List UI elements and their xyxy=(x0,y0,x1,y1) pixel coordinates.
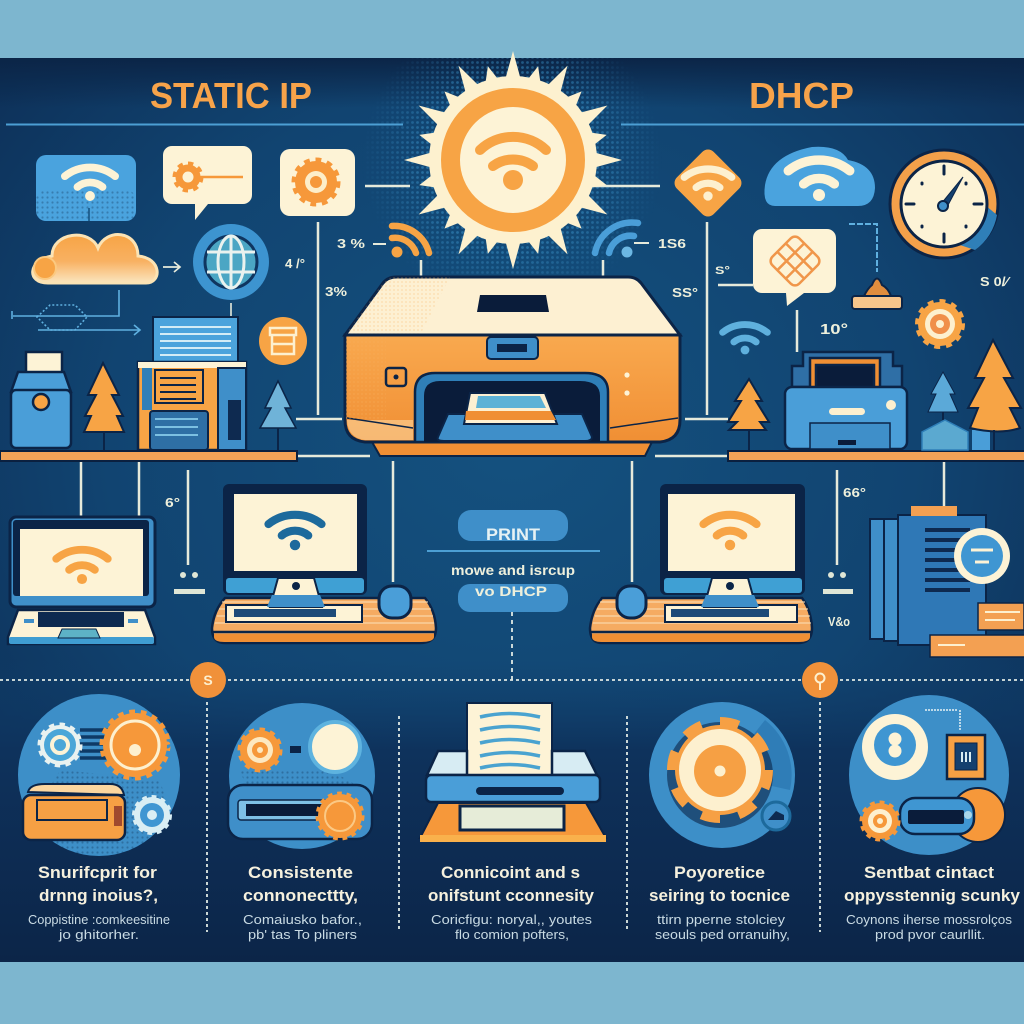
circuit connector xyxy=(12,290,231,335)
icon: laptop xyxy=(8,517,155,644)
icon: gauge clock xyxy=(890,150,998,258)
column 1 description: Coppistine :comkeesitine xyxy=(28,912,170,927)
column 3 title: onifstunt cconnesity xyxy=(428,887,595,905)
label: 3%: 3% xyxy=(325,284,348,299)
divider dots xyxy=(0,612,1024,932)
label: S: S° xyxy=(715,265,730,277)
icon: teal lock badge xyxy=(922,420,968,450)
panel: column 4 xyxy=(649,702,795,942)
label: 1S6: 1S6 xyxy=(658,236,686,251)
column 1 description: jo ghitorher. xyxy=(58,927,139,942)
badge label: PRINT xyxy=(486,525,541,544)
icon: small blue printer xyxy=(11,352,71,448)
panel: column 5 xyxy=(844,695,1021,942)
icon: orange tree left xyxy=(84,363,124,450)
column 2 title: Consistente xyxy=(248,864,353,882)
node marker left xyxy=(174,572,205,594)
icon: right monitor and desk xyxy=(590,484,812,643)
column 1 title: drnng inoius?, xyxy=(39,887,158,905)
step marker left: S xyxy=(203,672,213,688)
icon: server stack xyxy=(870,506,1024,657)
icon: blue wifi signal xyxy=(595,223,638,256)
icon: gears and drive xyxy=(228,703,375,849)
column 5 title: oppysstennig scunky xyxy=(844,887,1021,905)
column 5 description: Coynons iherse mossrolços xyxy=(846,912,1013,927)
icon: speech bubble with lattice xyxy=(753,229,836,306)
column 2 title: connonecttty, xyxy=(243,887,358,905)
panel: column 2 xyxy=(228,703,375,942)
icon: document server xyxy=(138,317,246,450)
connector lines xyxy=(81,186,944,582)
icon: orange wifi signal xyxy=(392,226,429,256)
node marker right xyxy=(823,572,853,594)
icon: blue printer right xyxy=(785,352,907,449)
step marker left xyxy=(190,662,226,698)
icon: orange tree big xyxy=(968,340,1021,450)
icon: blue tree right xyxy=(928,372,958,420)
icon: printer with paper xyxy=(420,703,606,842)
icon: small wifi xyxy=(723,325,767,354)
column 4 description: seouls ped orranuihy, xyxy=(655,927,790,942)
label: 4: 4 /° xyxy=(285,256,305,271)
icon: orange tree right small xyxy=(728,379,769,450)
arrow: cloud to globe xyxy=(163,262,180,272)
badge subtitle: mowe and isrcup xyxy=(451,563,575,578)
column 3 title: Connicoint and s xyxy=(441,864,580,882)
column 3 description: Coricfigu: noryal,, youtes xyxy=(431,912,593,927)
icon: speech bubble with gear xyxy=(163,146,252,220)
shelf: right xyxy=(728,451,1024,461)
shelf: left xyxy=(0,451,297,461)
title: static ip: STATIC IP xyxy=(150,75,312,116)
icon: settings and connector xyxy=(849,695,1009,855)
label: SS: SS° xyxy=(672,285,698,300)
column 4 title: Poyoretice xyxy=(674,864,765,882)
column 5 description: prod pvor caurllit. xyxy=(875,927,985,942)
icon: orange diamond wifi xyxy=(671,146,745,220)
title: dhcp: DHCP xyxy=(749,75,854,116)
panel: column 3 xyxy=(420,703,606,942)
icon: large gear xyxy=(649,702,795,848)
panel: print vs dhcp badge xyxy=(427,510,600,612)
step marker right xyxy=(802,662,838,698)
column 2 description: pb' tas To pliners xyxy=(248,927,358,942)
icon: orange gear right xyxy=(918,302,962,346)
label: S 0: S 0/⁄ xyxy=(980,274,1011,289)
column 1 title: Snurifcprit for xyxy=(38,864,158,882)
badge subtitle second line: vo DHCP xyxy=(475,583,547,599)
icon: blue wifi panel xyxy=(36,155,136,221)
icon: dashed lamp xyxy=(849,224,902,309)
icon: sun with wifi xyxy=(404,51,622,269)
icon: globe xyxy=(193,224,269,300)
column 2 description: Comaiusko bafor., xyxy=(243,912,362,927)
column 3 description: flo comion pofters, xyxy=(455,927,569,942)
icon: blue cloud wifi xyxy=(764,147,875,206)
label: 3% signal: 3 % xyxy=(337,236,366,251)
icon: left monitor and desk xyxy=(212,484,436,643)
label: 66: 66° xyxy=(843,485,866,500)
label: 6: 6° xyxy=(165,495,180,510)
label: 10: 10° xyxy=(820,321,848,338)
icon: gear tile xyxy=(280,149,355,216)
icon: orange cloud xyxy=(33,235,157,283)
column 4 description: ttirn pperne stolciey xyxy=(657,912,786,927)
column 5 title: Sentbat cintact xyxy=(864,864,995,882)
panel: column 1 xyxy=(18,694,180,942)
label: Vo: V&o xyxy=(828,614,850,629)
column 4 title: seiring to tocnice xyxy=(649,887,790,905)
icon: orange badge xyxy=(259,317,307,365)
icon: blue tree left xyxy=(260,381,296,450)
icon: gears and router xyxy=(18,694,180,858)
icon: central printer xyxy=(345,277,680,456)
